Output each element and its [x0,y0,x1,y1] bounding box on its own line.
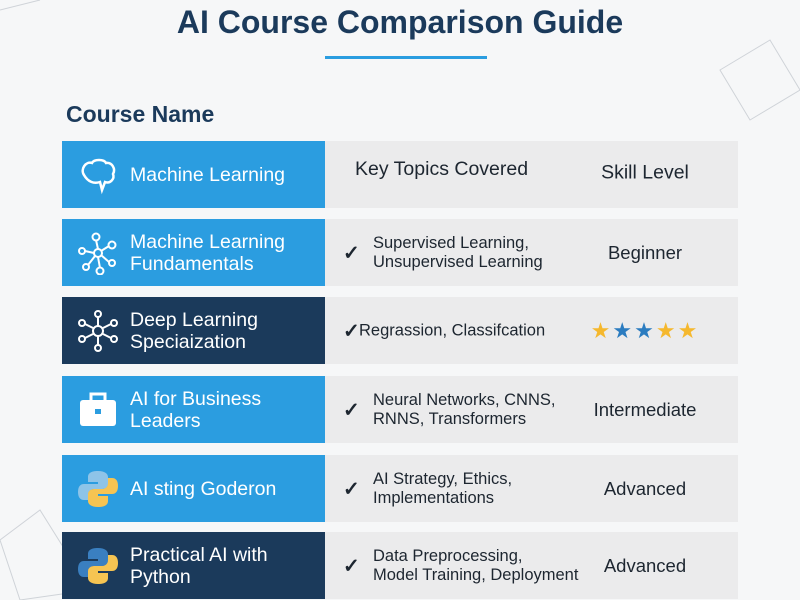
column heading: course name: Course Name [66,101,214,127]
row 2: ML fundamentals [62,219,738,286]
row 2: ML fundamentals: ✓ [343,242,360,264]
row 6: python: Advanced [604,554,686,576]
row 5: goderon: AI Strategy, Ethics, [373,470,512,488]
row 5: goderon [62,455,738,522]
row 4: business: RNNS, Transformers [373,410,526,428]
row 3: deep learning: Speciaization [130,330,246,352]
row 4: business [62,376,738,443]
row 2: ML fundamentals: Machine Learning [130,230,285,252]
title underline [325,56,487,59]
row 2: ML fundamentals: Beginner [608,242,682,262]
row 2: ML fundamentals: Supervised Learning, [373,234,529,252]
row 3: deep learning: Regrassion, Classifcation [359,321,545,339]
row 1: header: Machine Learning [130,164,285,186]
row 6: python: Model Training, Deployment [373,566,578,584]
row 3: deep learning [62,297,738,364]
row 4: business: ✓ [343,399,360,421]
row 4: business: Leaders [130,410,200,432]
row 5: goderon: ✓ [343,478,360,500]
row 4: business: Intermediate [594,398,696,420]
row 1: header: Skill Level [601,162,689,184]
row 6: python: Python [130,566,191,588]
row 5: goderon: Implementations [373,488,494,506]
title: AI Course Comparison Guide [177,4,623,40]
row 6: python: Data Preprocessing, [373,546,522,564]
row 5: goderon: Advanced [604,478,686,498]
row 5: goderon: AI sting Goderon [130,478,276,500]
row 3: deep learning: ✓ [343,320,360,342]
row 6: python: ✓ [343,555,360,577]
row 2: ML fundamentals: Fundamentals [130,252,254,274]
row 6: python: Practical AI with [130,544,268,566]
row 6: python [62,532,738,599]
row 3: deep learning: ★★★★★ [591,318,699,342]
row 4: business: Neural Networks, CNNS, [373,390,555,408]
row 3: deep learning: Deep Learning [130,308,258,330]
row 1: header [62,141,738,208]
row 1: header: Key Topics Covered [355,158,528,180]
row 2: ML fundamentals: Unsupervised Learning [373,252,543,270]
row 4: business: AI for Business [130,388,261,410]
